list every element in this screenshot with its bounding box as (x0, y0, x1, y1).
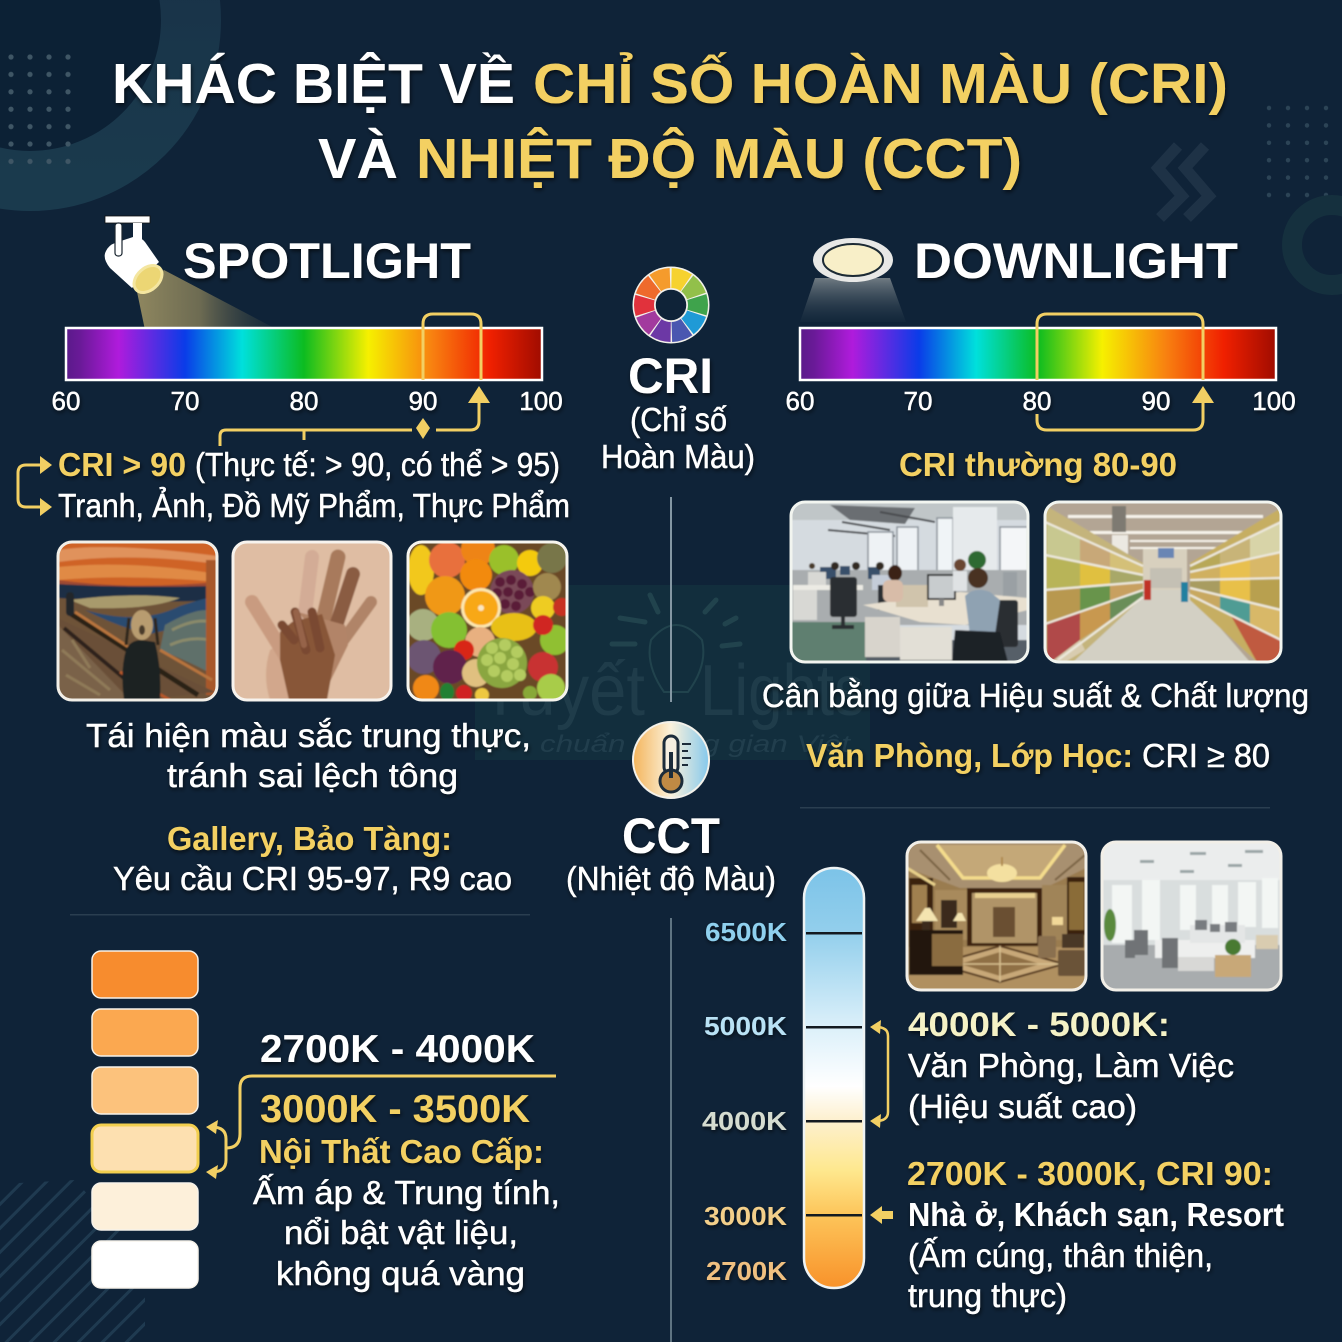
text: CCT range spotlight (253, 1028, 560, 1292)
text: gallery requirement: Yêu cầu CRI 95-97, R9 cao (113, 860, 512, 897)
axis labels: downlight (786, 386, 1296, 416)
heading: CCT: CCT (622, 808, 720, 864)
spectrum bar: downlight (800, 328, 1276, 380)
arrow: 4000-5000K bracket (870, 1020, 888, 1128)
background decoration: top-left dots (2, 48, 78, 170)
title: VÀ (318, 127, 398, 191)
text: 4000K-5000K use: 4000K - 5000K: (908, 1006, 1170, 1044)
icon: spotlight (105, 216, 278, 330)
panel: downlight CCT (702, 842, 1284, 1314)
scale labels: 3000K (704, 1201, 787, 1231)
scale labels: 2700K (706, 1256, 787, 1286)
image: fruit (407, 532, 571, 702)
axis labels: spotlight: 80 (290, 386, 318, 416)
scale labels: 4000K (702, 1106, 787, 1136)
title: NHIỆT ĐỘ MÀU (CCT) (416, 126, 1022, 191)
text: CRI meaning (601, 401, 755, 475)
text: gallery requirement: Gallery, Bảo Tàng: (167, 820, 452, 857)
scale labels: 5000K (704, 1011, 787, 1041)
scale labels: 6500K (705, 917, 787, 947)
title (112, 51, 1228, 191)
panel: spotlight CCT (92, 951, 560, 1292)
axis labels: spotlight: 100 (519, 386, 563, 416)
image: hotel lobby (907, 842, 1086, 990)
scale labels (702, 917, 787, 1286)
watermark: chuẩn không gian Việt (540, 731, 852, 758)
image: supermarket (1045, 502, 1281, 665)
title: CHỈ SỐ HOÀN MÀU (CRI) (533, 51, 1228, 116)
swatches: warm colour scale (92, 951, 198, 1288)
highlight bracket: CRI 80-90 range (1037, 314, 1203, 380)
image: white office (1102, 842, 1281, 990)
text: CCT range spotlight: Ấm áp & Trung tính, (253, 1174, 560, 1211)
center column: CCT (566, 722, 776, 897)
heading: CRI: CRI (628, 348, 713, 404)
background decoration: diagonal lines (0, 1180, 145, 1342)
axis labels: downlight: 60 (786, 386, 814, 416)
title: KHÁC BIỆT VỀ (112, 51, 515, 116)
text: gallery requirement (113, 820, 512, 897)
highlight bracket: CRI 90 range (423, 314, 481, 380)
text: CRI meaning: (Chỉ số (630, 401, 727, 438)
image: office (791, 502, 1028, 662)
caption: spotlight: Tái hiện màu sắc trung thực, (86, 717, 531, 754)
text: 4000K-5000K use: (Hiệu suất cao) (908, 1088, 1137, 1125)
text: CRI > 90: Tranh, Ảnh, Đồ Mỹ Phẩm, Thực Phẩm (58, 487, 570, 524)
text: CRI > 90: (Thực tế: > 90, có thể > 95) (195, 446, 560, 483)
text: 4000K-5000K use (908, 1006, 1234, 1125)
axis labels: spotlight: 70 (171, 386, 199, 416)
axis labels: downlight: 90 (1142, 386, 1170, 416)
watermark: Tuyết (480, 651, 645, 731)
axis labels: spotlight: 60 (52, 386, 80, 416)
axis labels: spotlight (52, 386, 563, 416)
text: CCT range spotlight: 2700K - 4000K (260, 1028, 535, 1071)
image: hands (233, 542, 391, 700)
text: 2700K-3000K use: trung thực) (908, 1277, 1067, 1314)
arrow: swatch bracket and leader (206, 1076, 556, 1179)
arrow: CRI 80-90 bracket (1037, 386, 1214, 430)
text: CRI > 90 (58, 446, 570, 524)
center column: CRI (601, 266, 755, 475)
text: office and classroom: Văn Phòng, Lớp Học: (806, 737, 1133, 774)
background decoration: right ring (1292, 205, 1342, 285)
text: CCT meaning: (Nhiệt độ Màu) (566, 860, 776, 897)
axis labels: downlight: 100 (1252, 386, 1296, 416)
caption: downlight: Cân bằng giữa Hiệu suất & Chất lượng (762, 677, 1309, 714)
text: CCT range spotlight: Nội Thất Cao Cấp: (259, 1133, 544, 1170)
text: office and classroom: CRI ≥ 80 (1142, 737, 1270, 774)
thermal scale bar (804, 868, 864, 1288)
axis labels: downlight: 80 (1023, 386, 1051, 416)
arrow: 3000K (870, 1206, 893, 1224)
caption: spotlight: tránh sai lệch tông (167, 757, 458, 794)
text: 2700K-3000K use: 2700K - 3000K, CRI 90: (907, 1155, 1273, 1192)
watermark (475, 585, 870, 760)
text: CCT range spotlight: nổi bật vật liệu, (284, 1214, 518, 1251)
text: CCT range spotlight: 3000K - 3500K (260, 1088, 530, 1131)
icon: downlight (800, 238, 906, 322)
text: CRI thường 80-90: CRI thường 80-90 (899, 446, 1177, 483)
heading: downlight: DOWNLIGHT (914, 233, 1238, 289)
text: 4000K-5000K use: Văn Phòng, Làm Việc (908, 1047, 1234, 1084)
caption: spotlight (86, 717, 531, 794)
axis labels: downlight: 70 (904, 386, 932, 416)
watermark: Lights (700, 651, 865, 731)
text: CRI meaning: Hoàn Màu) (601, 438, 755, 475)
heading: spotlight: SPOTLIGHT (183, 233, 471, 289)
panel: downlight CRI (762, 233, 1309, 774)
text: 2700K-3000K use: Nhà ở, Khách sạn, Resort (908, 1196, 1284, 1233)
arrow: CRI pointer (220, 386, 490, 446)
text: CRI > 90: CRI > 90 (58, 446, 186, 483)
text: CCT range spotlight: không quá vàng (276, 1255, 525, 1292)
background decoration: chevrons (1158, 146, 1209, 218)
spectrum bar: spotlight (66, 328, 542, 380)
text: 2700K-3000K use (907, 1155, 1284, 1314)
image: painting (58, 542, 217, 700)
arrows: CRI list bracket (18, 456, 52, 516)
background decoration: top-left ring (0, 0, 191, 181)
text: 2700K-3000K use: (Ấm cúng, thân thiện, (908, 1237, 1213, 1274)
icon: thermometer (633, 722, 709, 798)
axis labels: spotlight: 90 (409, 386, 437, 416)
icon: colour wheel (632, 266, 710, 344)
background decoration: top-right dots (1260, 99, 1336, 204)
panel: spotlight CRI (18, 216, 571, 897)
